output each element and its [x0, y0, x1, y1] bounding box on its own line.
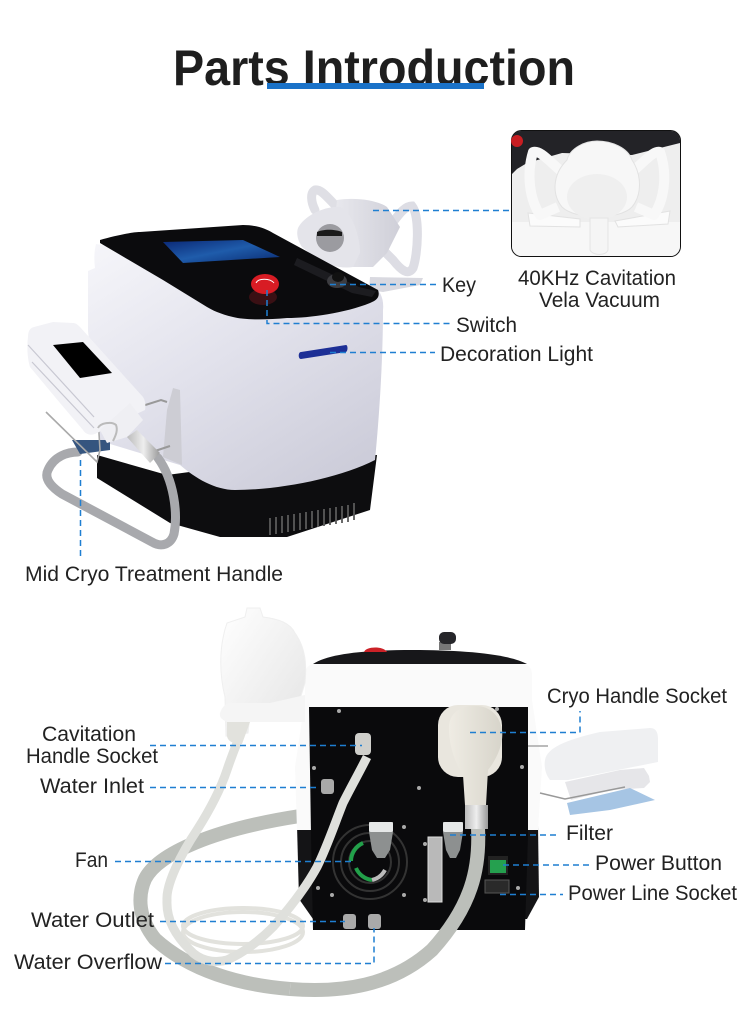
key	[327, 272, 347, 288]
vents	[270, 503, 354, 535]
water inlet	[321, 779, 334, 794]
black rear panel	[309, 707, 528, 930]
black base	[97, 455, 377, 537]
grey hose back part	[140, 816, 300, 989]
dashed leader: switch	[267, 290, 450, 324]
panel screws	[314, 709, 522, 900]
front machine photo	[27, 190, 423, 545]
wire frame	[46, 412, 100, 462]
dashed leader: mid cryo handle	[80, 460, 82, 557]
label: Cavitation Handle Socket: Cavitation	[42, 723, 136, 746]
dashed leader: water overflow	[165, 928, 374, 964]
label: Cavitation Handle Socket	[26, 723, 158, 768]
cryo socket handle	[438, 705, 502, 829]
label: Fan: Fan	[75, 849, 108, 872]
filters	[369, 822, 463, 858]
label: Mid Cryo Treatment Handle: Mid Cryo Treatment Handle	[25, 563, 283, 586]
dashed leader: decoration light	[330, 352, 435, 354]
cavitation socket	[355, 733, 371, 755]
pad	[72, 440, 110, 454]
handle neck	[100, 403, 143, 443]
decoration light	[299, 345, 348, 359]
water outlet and overflow	[343, 914, 356, 929]
white coil	[183, 908, 303, 952]
cryo handle rear	[528, 728, 658, 815]
top dome	[313, 650, 527, 664]
grey hose front part	[290, 828, 478, 990]
key switch	[439, 632, 456, 650]
title: Parts Introduction	[173, 40, 575, 96]
label: 40KHz Cavitation Vela Vacuum	[518, 267, 676, 312]
red stop button	[364, 648, 387, 652]
tray of cavitation handle	[369, 277, 423, 292]
rear machine photo	[140, 608, 658, 990]
screen	[163, 240, 280, 263]
black top	[100, 225, 379, 319]
lower black body	[297, 825, 539, 919]
red switch	[249, 274, 279, 305]
flow gauge	[428, 837, 442, 902]
dashed leader: power button	[503, 864, 590, 866]
label: Filter: Filter	[566, 822, 613, 845]
power socket	[485, 880, 509, 893]
dashed leader: water outlet	[160, 920, 345, 922]
handpiece and tray	[220, 608, 306, 744]
white hose	[167, 743, 367, 962]
dashed leader: power line socket	[500, 894, 563, 896]
cryo handle	[27, 322, 145, 435]
label: 40KHz Cavitation Vela Vacuum: 40KHz Cavitation	[518, 267, 676, 290]
dashed leader: cryo socket	[470, 711, 580, 732]
label: Water Overflow: Water Overflow	[14, 951, 163, 974]
label: Key: Key	[442, 274, 476, 297]
label: Switch: Switch	[456, 314, 517, 337]
fan	[333, 825, 407, 899]
dashed leader: filter	[450, 834, 560, 836]
label: Water Outlet: Water Outlet	[31, 909, 154, 932]
label: Power Line Socket: Power Line Socket	[568, 882, 737, 905]
white body	[88, 244, 383, 490]
dashed leader: vela	[373, 210, 512, 212]
dashed leader: key	[330, 284, 437, 286]
dashed leader: water inlet	[150, 786, 320, 788]
label: Decoration Light: Decoration Light	[440, 343, 593, 366]
power button	[488, 856, 508, 875]
white cap and side shells	[295, 664, 542, 830]
label: Power Button: Power Button	[595, 852, 722, 875]
dashed leader: cavitation socket	[150, 744, 362, 746]
label: Cryo Handle Socket: Cryo Handle Socket	[547, 685, 727, 708]
label: Water Inlet: Water Inlet	[40, 775, 144, 798]
dashed leader: fan	[115, 860, 352, 862]
label: 40KHz Cavitation Vela Vacuum: Vela Vacuum	[539, 289, 660, 312]
metal holder	[163, 388, 182, 465]
label: Cavitation Handle Socket: Handle Socket	[26, 745, 158, 768]
grey cable of handle	[47, 452, 175, 545]
cavitation handle	[297, 190, 417, 272]
vela inset photo	[511, 130, 680, 256]
